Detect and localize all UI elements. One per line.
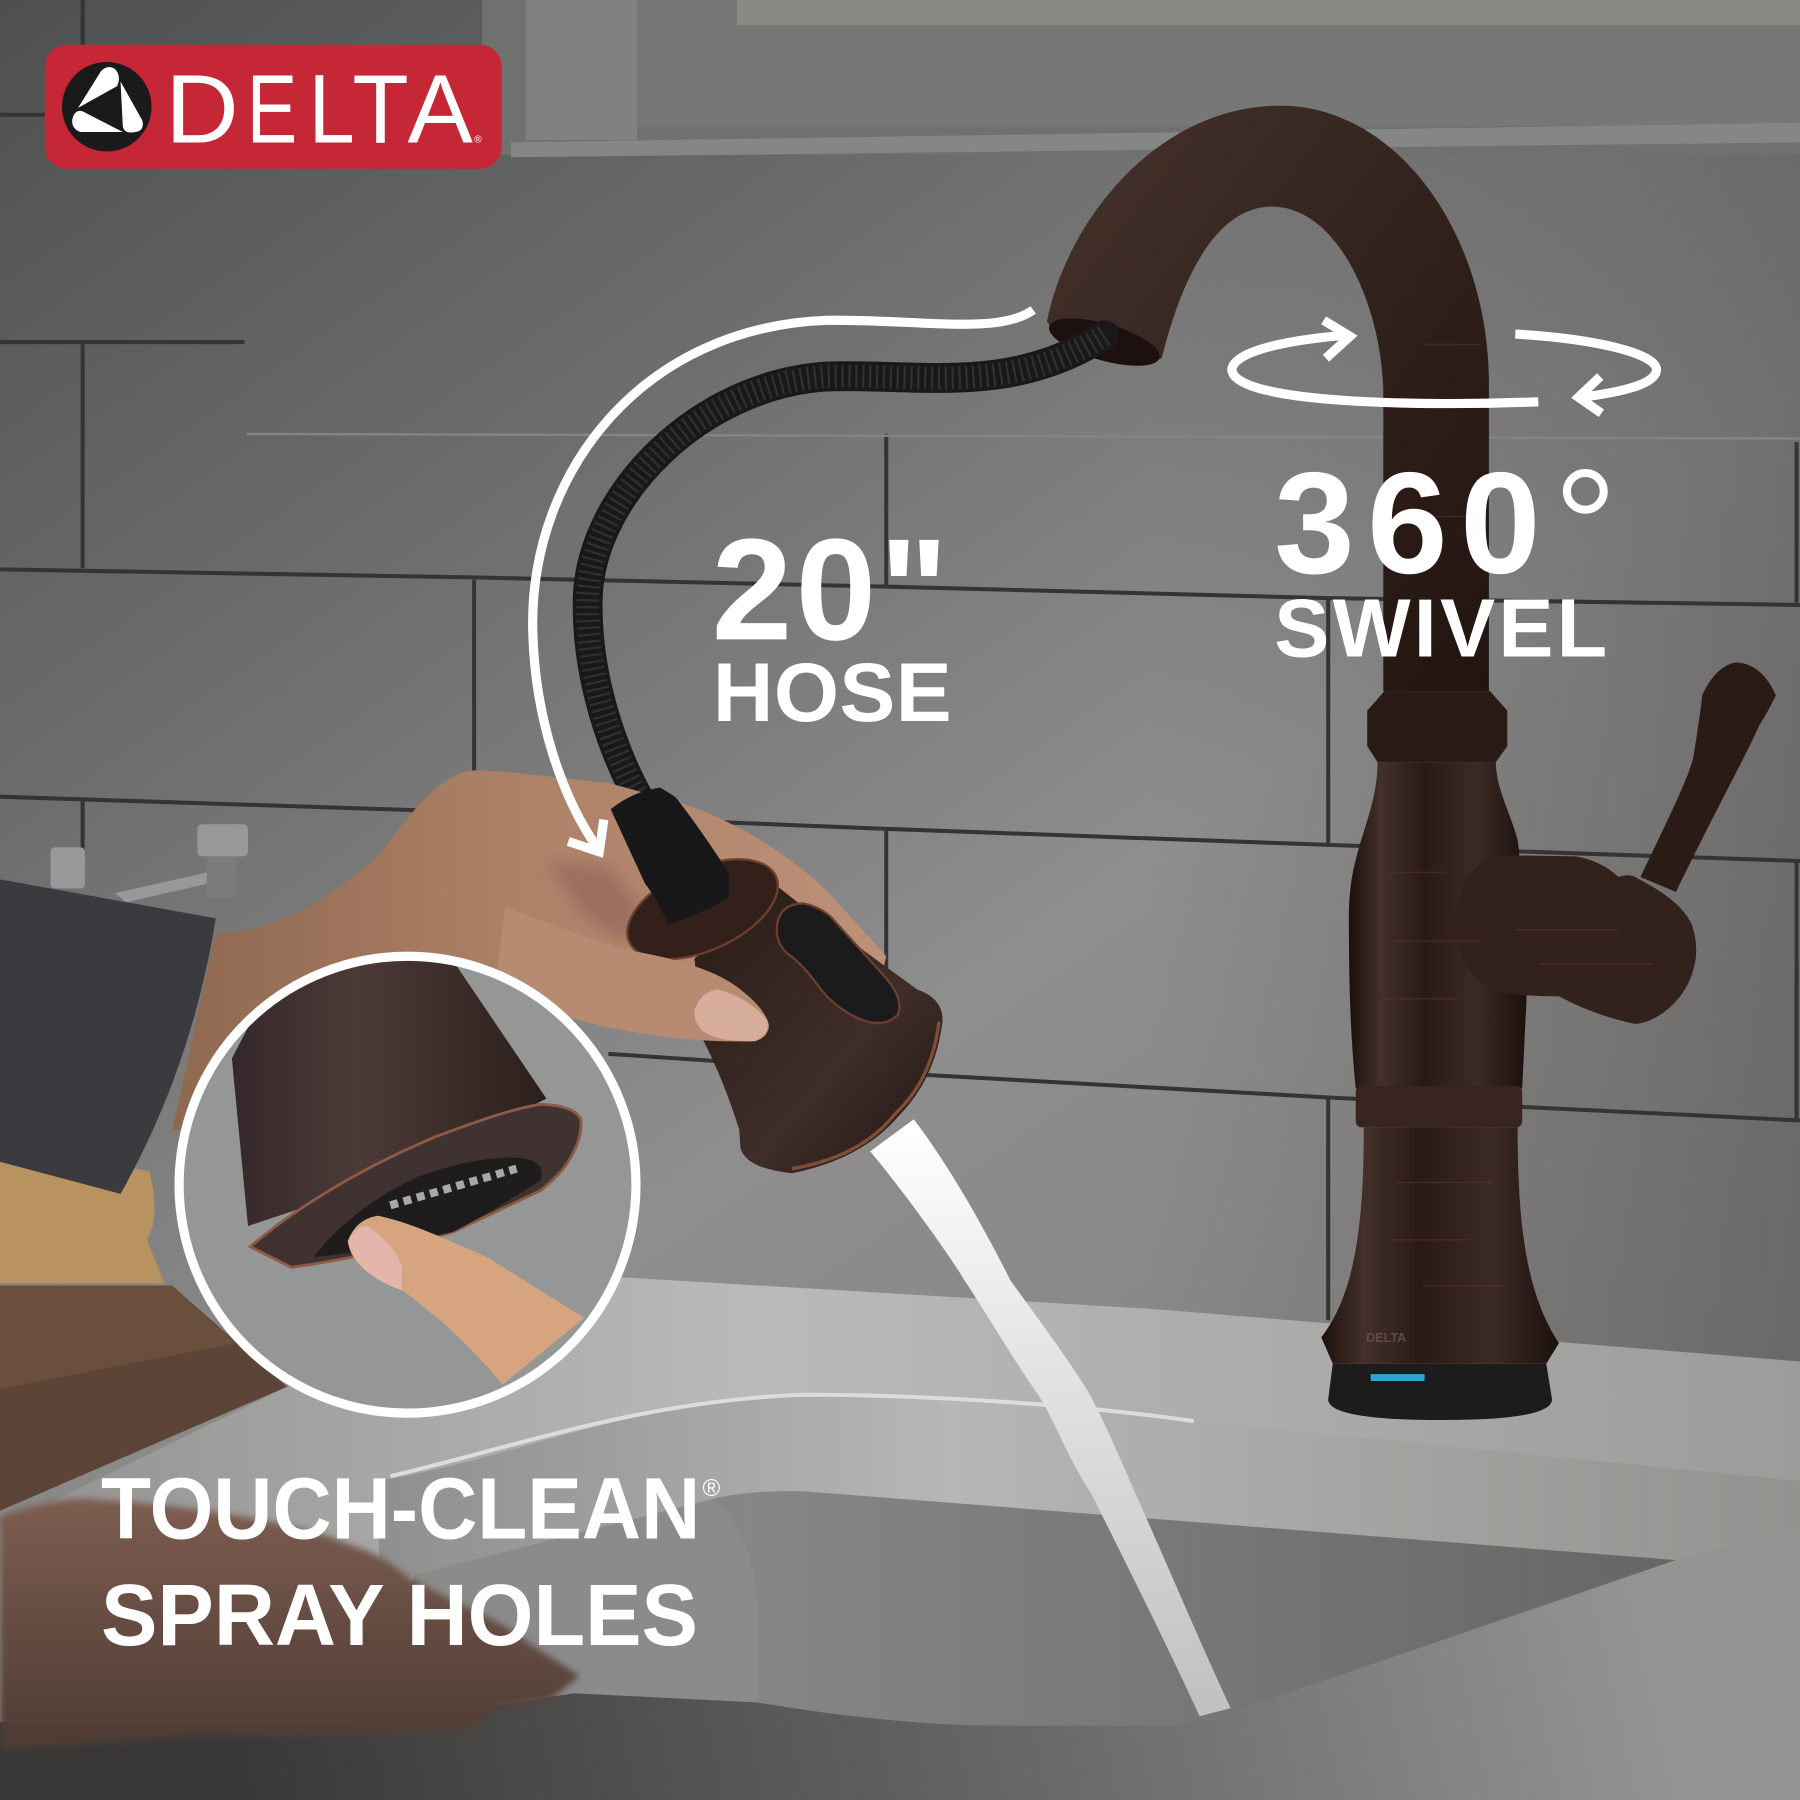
spout opening [1044,309,1165,376]
copper rim [792,1022,939,1169]
hose word: HOSE [713,645,952,739]
360 degrees: 360 [1274,442,1541,604]
label: touch-clean spray holes [101,1460,721,1664]
logo wordmark: L [309,54,355,163]
logo badge [45,45,502,169]
hose arrow [533,310,1033,852]
sink bowl [413,1491,1676,1725]
inset fingernail [348,1226,402,1290]
countertop [0,1277,1800,1800]
degree mark [1567,473,1604,510]
touch-clean inset [179,953,636,1413]
spray button [777,903,899,1023]
logo wordmark: E [247,54,297,163]
head body [695,886,943,1173]
hand holding spray head [172,770,886,1131]
hose connector [611,788,729,924]
handle hub [1454,855,1696,1024]
middle ring [1356,1086,1522,1127]
20 inches: 20" [712,508,948,670]
registered mark: ® [703,1475,721,1502]
spray holes: SPRAY HOLES [101,1567,698,1664]
window frame [482,0,1800,157]
spray head [494,788,943,1173]
body [1349,762,1527,1088]
inset background [181,959,634,1411]
delta logo [45,45,502,169]
left hand lower corner [0,1499,580,1749]
sink lip face [379,1395,1800,1586]
logo wordmark [165,54,473,163]
brand mark: DELTA [1366,1331,1406,1345]
logo wordmark: A [408,54,473,163]
logo registered mark: ® [474,134,482,145]
pepper mill [0,1148,164,1283]
upper ring [1367,691,1507,762]
inset nozzle dots [390,1169,517,1205]
logo wordmark: D [165,54,239,163]
label: 20 inch hose [712,508,952,739]
wooden cutting board [0,1286,287,1511]
inset rim [250,1104,581,1267]
faucet [1044,106,1776,1420]
braided hose [588,335,1104,809]
logo mark [62,62,152,152]
swivel word: SWIVEL [1274,582,1607,675]
chrome fixture behind hand [51,824,248,902]
label: 360 swivel [1274,442,1607,675]
inset finger [348,1216,584,1384]
thumb [494,907,769,1041]
handle lever [1640,662,1776,892]
tile grout lines [0,0,1800,1320]
thumb nail [694,990,768,1041]
sink rim highlight [390,1395,1194,1476]
logo wordmark: T [352,54,409,163]
inset spray head [232,953,546,1226]
inset ring [179,956,636,1413]
spout [1047,106,1489,691]
lower body [1321,1127,1559,1364]
touch-clean: TOUCH-CLEAN [101,1460,700,1557]
counter front edge [0,1527,1800,1800]
swivel arrows [1232,320,1657,413]
sweater sleeve [0,879,216,1194]
inset spray face [313,1158,542,1257]
base [1328,1364,1552,1420]
water stream [870,1119,1231,1716]
led [1371,1374,1425,1381]
copper brushing [1383,344,1653,1286]
head flange [612,839,793,980]
